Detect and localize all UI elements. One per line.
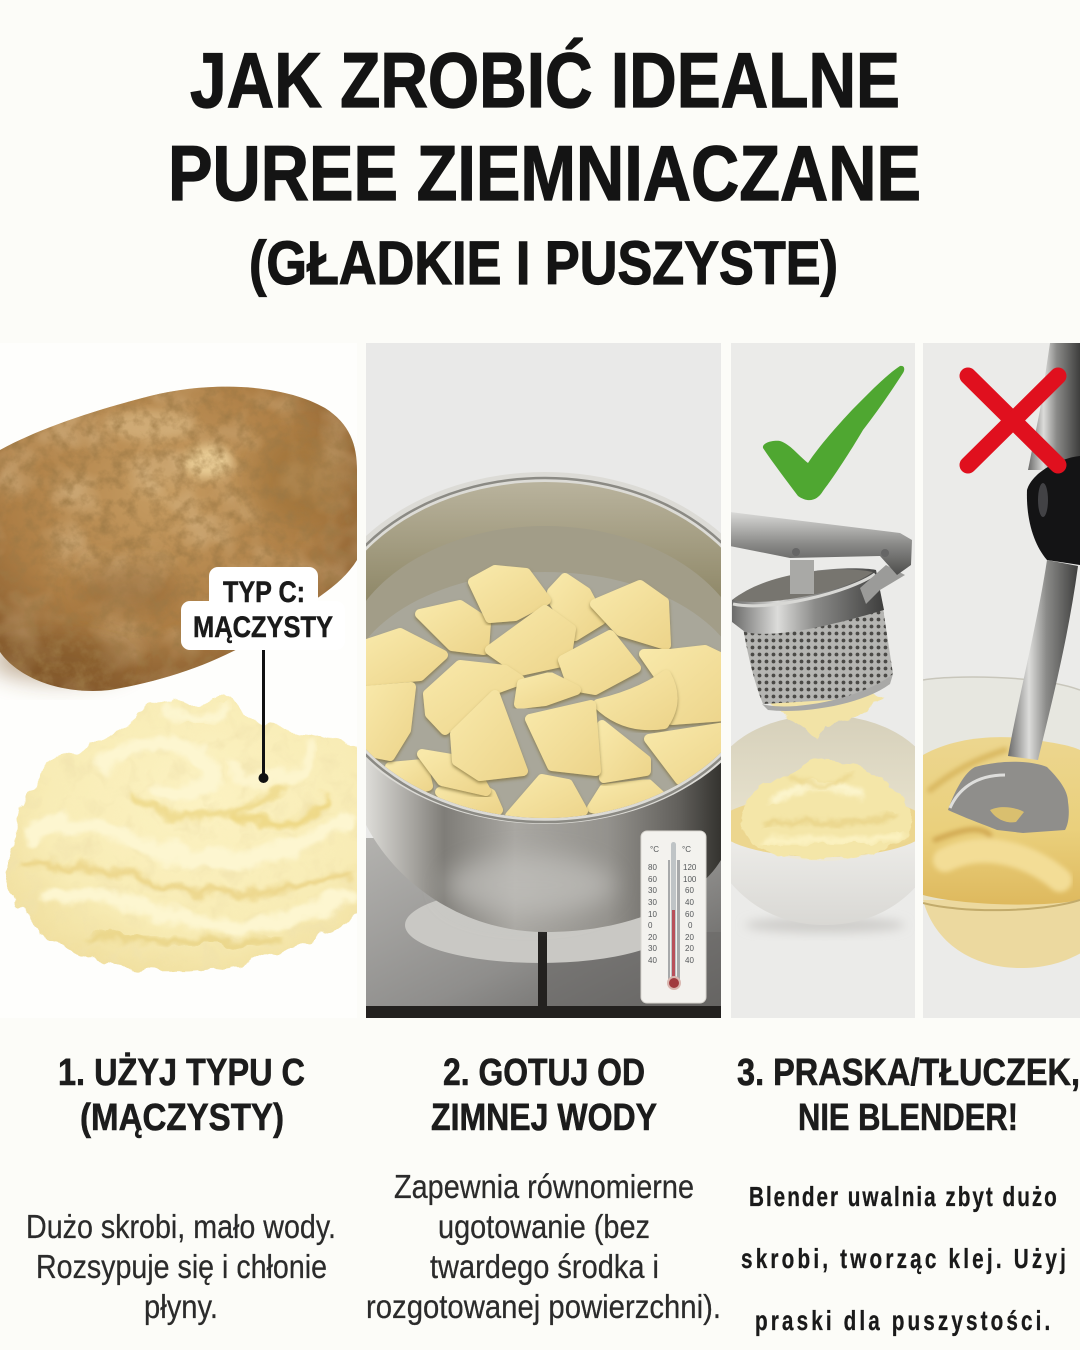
panel: pot with potatoes bbox=[366, 343, 721, 1018]
icon: thermometer: 80 bbox=[648, 863, 657, 872]
text: step 2 description: twardego środka i bbox=[430, 1248, 659, 1285]
text: step 2 description: ugotowanie (bez bbox=[438, 1208, 650, 1245]
heading: step 1 bbox=[58, 1052, 305, 1139]
heading: step 1: 1. UŻYJ TYPU C bbox=[58, 1052, 305, 1094]
icon: mashed potato mound bbox=[8, 698, 365, 972]
text: step 3 description: Blender uwalnia zbyt dużo bbox=[749, 1182, 1057, 1213]
heading: step 2: 2. GOTUJ OD bbox=[443, 1052, 645, 1094]
potato chunks bbox=[365, 570, 726, 818]
icon: thermometer: 20 bbox=[685, 933, 694, 942]
icon: thermometer: 40 bbox=[648, 956, 657, 965]
heading: step 2: ZIMNEJ WODY bbox=[431, 1097, 657, 1139]
icon: raw potato bbox=[0, 387, 357, 691]
icon: thermometer: 100 bbox=[683, 875, 697, 884]
icon: thermometer: 30 bbox=[648, 944, 657, 953]
heading: step 3 bbox=[737, 1052, 1080, 1139]
callout: type C floury bbox=[181, 567, 345, 783]
icon: thermometer: 40 bbox=[685, 898, 694, 907]
icon: thermometer: °C bbox=[650, 845, 659, 854]
text: step 2 description bbox=[366, 1168, 721, 1325]
text: step 1 description bbox=[26, 1208, 336, 1325]
panel: immersion blender bbox=[923, 343, 1080, 1018]
text: step 1 description: Dużo skrobi, mało wody. bbox=[26, 1208, 336, 1245]
text: step 3 description: praski dla puszystości. bbox=[755, 1306, 1050, 1337]
icon: glass bowl with mash bbox=[923, 677, 1080, 968]
icon: red cross bbox=[968, 376, 1058, 465]
icon: thermometer: °C bbox=[682, 845, 691, 854]
callout: type C floury: TYP C: bbox=[223, 576, 305, 609]
text: step 1 description: płyny. bbox=[144, 1288, 218, 1325]
icon: thermometer: 0 bbox=[688, 921, 693, 930]
icon: thermometer: 30 bbox=[648, 886, 657, 895]
heading: step 2 bbox=[431, 1052, 657, 1139]
heading: step 1: (MĄCZYSTY) bbox=[80, 1097, 284, 1139]
title: JAK ZROBIĆ IDEALNE bbox=[190, 36, 900, 124]
icon: thermometer: 40 bbox=[685, 956, 694, 965]
text: step 3 description bbox=[741, 1182, 1066, 1337]
icon: thermometer: 120 bbox=[683, 863, 697, 872]
text: step 2 description: rozgotowanej powierzchni). bbox=[366, 1288, 721, 1325]
stove bbox=[366, 838, 721, 1018]
icon: thermometer: 60 bbox=[648, 875, 657, 884]
icon: hand blender bbox=[948, 343, 1080, 833]
panel: potato type C bbox=[0, 386, 357, 973]
callout: type C floury: MĄCZYSTY bbox=[193, 611, 333, 644]
icon: thermometer: 60 bbox=[685, 886, 694, 895]
icon: thermometer: 20 bbox=[685, 944, 694, 953]
icon: thermometer: 20 bbox=[648, 933, 657, 942]
icon: thermometer: 30 bbox=[648, 898, 657, 907]
title: PUREE ZIEMNIACZANE bbox=[168, 129, 921, 217]
title: (GŁADKIE I PUSZYSTE) bbox=[249, 229, 838, 297]
icon: thermometer bbox=[641, 831, 706, 1003]
icon: white bowl with mash bbox=[731, 718, 915, 936]
heading: step 3: NIE BLENDER! bbox=[798, 1097, 1018, 1139]
title bbox=[168, 36, 921, 297]
panel: potato ricer bbox=[731, 343, 915, 1018]
text: step 3 description: skrobi, tworząc klej. Użyj bbox=[741, 1244, 1066, 1275]
icon: ricer press bbox=[730, 512, 912, 738]
text: step 1 description: Rozsypuje się i chłonie bbox=[36, 1248, 327, 1285]
text: step 2 description: Zapewnia równomierne bbox=[394, 1168, 694, 1205]
icon: thermometer: 10 bbox=[648, 910, 657, 919]
icon: green check mark bbox=[763, 366, 904, 500]
icon: thermometer: 0 bbox=[648, 921, 653, 930]
icon: steel pot bbox=[366, 472, 721, 932]
icon: thermometer: 60 bbox=[685, 910, 694, 919]
